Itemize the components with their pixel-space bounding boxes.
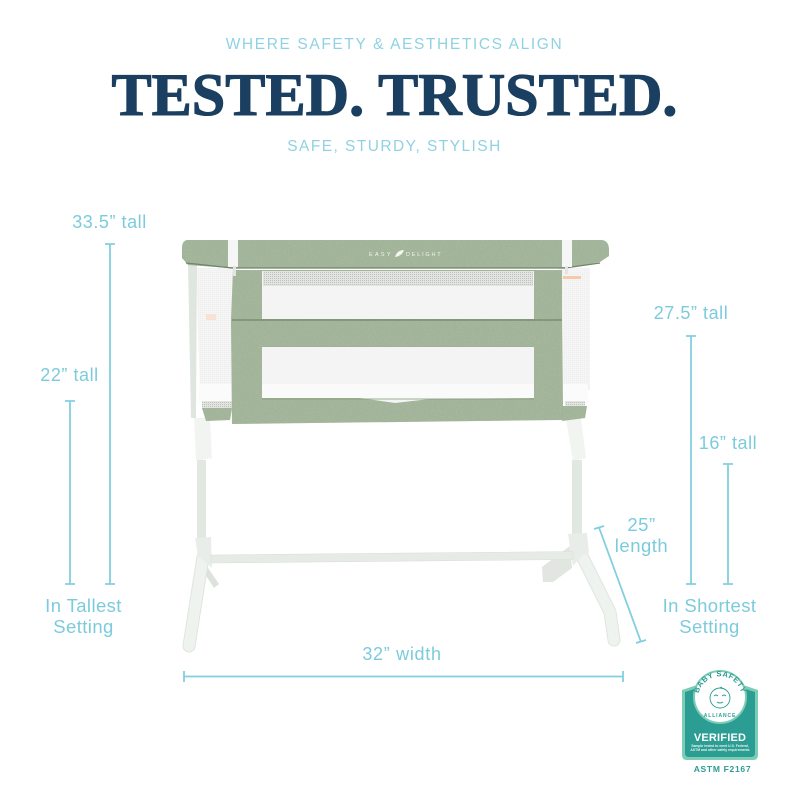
- label: in shortest setting: In Shortest: [663, 595, 756, 616]
- dimension: 16 tall: 16” tall: [699, 433, 757, 453]
- right stand leg: [542, 418, 614, 640]
- dimension: 33.5 tall: 33.5” tall: [72, 212, 147, 232]
- dimension: 22 tall: [40, 365, 99, 584]
- bassinet illustration: [182, 240, 614, 646]
- label: in shortest setting: Setting: [679, 616, 740, 637]
- dimension: 33.5 tall: [72, 212, 147, 584]
- dimension: 32 width: 32” width: [362, 644, 442, 664]
- dimension: 25 length: [594, 514, 668, 643]
- zippers: [228, 240, 238, 267]
- side mesh: [196, 268, 236, 390]
- astm label: ASTM F2167: [694, 764, 751, 774]
- window lower: [262, 346, 534, 403]
- verified text: VERIFIED: [694, 732, 746, 744]
- badge: baby safety alliance verified: Sample tested to meet U.S. Federal,: [691, 744, 749, 748]
- left stand leg: [189, 418, 219, 646]
- orange labels: [206, 314, 216, 320]
- dimension: 25 length: 25”: [627, 514, 656, 535]
- dimension: 27.5 tall: 27.5” tall: [654, 303, 728, 323]
- baby face: [710, 687, 730, 708]
- badge: baby safety alliance verified: ALLIANCE: [704, 713, 736, 719]
- top rail: [182, 240, 609, 268]
- dimension: 16 tall: [699, 433, 757, 584]
- badge: baby safety alliance verified: [682, 670, 758, 774]
- badge: baby safety alliance verified: ASTM and other safety requirements: [690, 748, 750, 752]
- bassinet fabric: [202, 270, 587, 424]
- badge shield: [682, 685, 758, 760]
- pocket seam: [232, 319, 562, 321]
- subtitle: SAFE, STURDY, STYLISH: [287, 138, 502, 155]
- dimension: 27.5 tall: [654, 303, 728, 584]
- eyebrow heading: WHERE SAFETY & AESTHETICS ALIGN: [226, 36, 563, 53]
- crossbar: [211, 552, 573, 563]
- title: TESTED. TRUSTED.: [112, 62, 677, 128]
- seal text: BABY SAFETY: [694, 671, 746, 693]
- label: in tallest setting: Setting: [53, 616, 114, 637]
- badge seal: [694, 671, 746, 723]
- label: in tallest setting: In Tallest: [45, 595, 122, 616]
- dimension: 22 tall: 22” tall: [40, 365, 99, 385]
- dimension: 32 width: [184, 644, 623, 682]
- window upper: [262, 271, 534, 319]
- bassinet illustration: DELIGHT: [406, 252, 442, 258]
- logo on rail: EASY: [369, 252, 393, 258]
- dimension: 25 length: length: [615, 535, 668, 556]
